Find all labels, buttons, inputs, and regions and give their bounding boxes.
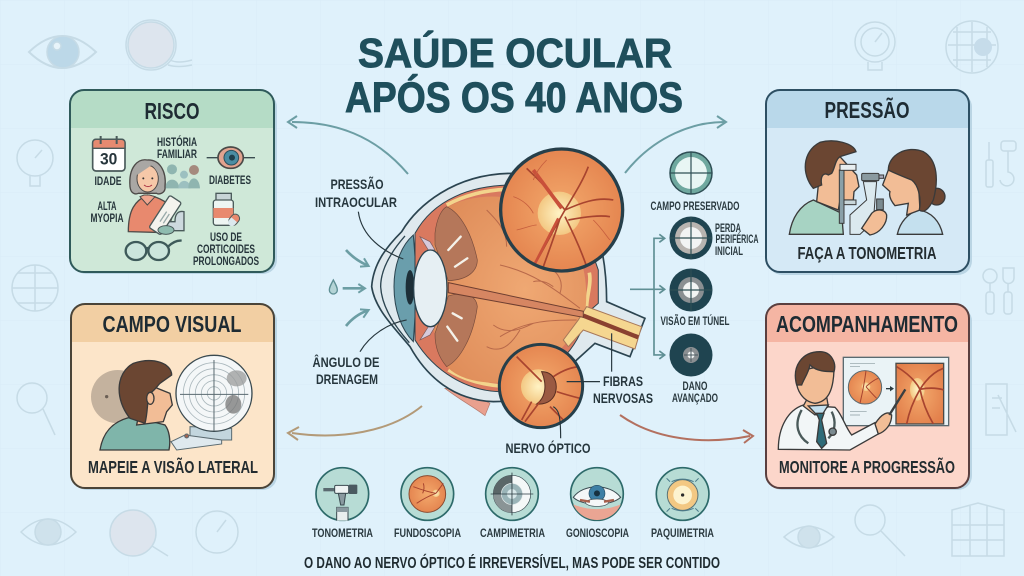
labels: risk factors: FAMILIAR xyxy=(157,147,197,161)
illustration: tonometry exam xyxy=(789,141,945,235)
diagnostic exam icons xyxy=(312,468,714,540)
tonometer xyxy=(862,173,884,210)
perimeter base xyxy=(171,427,232,450)
label: fibras nervosas xyxy=(593,373,653,406)
ciliary body xyxy=(435,207,477,367)
pointer xyxy=(889,389,905,415)
icon: eye with vessel xyxy=(207,147,255,168)
icon: calendar xyxy=(93,136,125,171)
icon: faint tools right top xyxy=(986,141,1016,187)
exam labels: PAQUIMETRIA xyxy=(651,528,714,540)
illustration: risk factors xyxy=(93,136,255,260)
title: APÓS OS 40 ANOS xyxy=(345,73,683,122)
caption: acompanhamento: MONITORE A PROGRESSÃO xyxy=(779,456,955,477)
icon: faint tools right bottom xyxy=(983,268,1014,314)
perimeter dome xyxy=(176,355,252,431)
patient xyxy=(100,361,172,450)
icon: faint grid globe left xyxy=(12,265,58,311)
heading: pressao: PRESSÃO xyxy=(824,96,910,123)
icon: family xyxy=(165,164,200,188)
footer message: O DANO AO NERVO ÓPTICO É IRREVERSÍVEL, MAS PODE SER CONTIDO xyxy=(304,553,720,572)
pupil xyxy=(406,270,414,305)
title xyxy=(345,30,683,122)
label: fibras nervosas: NERVOSAS xyxy=(593,390,653,406)
illustration: doctor and retina board xyxy=(778,352,949,450)
field labels: PERIFÉRICA xyxy=(716,233,758,246)
icon: faint grid globe top right xyxy=(946,21,998,73)
icon: faint gauge bottom left xyxy=(196,511,238,553)
central tract xyxy=(448,283,583,317)
panel: campo visual xyxy=(71,304,277,490)
label: fibras nervosas: FIBRAS xyxy=(603,373,643,389)
muscle xyxy=(445,388,490,416)
icon: faint magnifier bottom right xyxy=(855,505,905,556)
icon: calendar: 30 xyxy=(100,150,117,169)
arrow: to risco xyxy=(288,116,408,174)
labels: risk factors: ALTA xyxy=(98,199,117,213)
iris xyxy=(394,235,415,342)
label: angulo de drenagem: ÂNGULO DE xyxy=(312,353,380,370)
field labels: INICIAL xyxy=(715,246,743,258)
icon: fundoscopia xyxy=(401,468,454,520)
shadow disc xyxy=(91,370,144,423)
caption: campo visual: MAPEIE A VISÃO LATERAL xyxy=(88,456,258,477)
patient xyxy=(789,141,859,234)
choroid xyxy=(415,185,598,392)
field labels: PERDA xyxy=(715,223,741,235)
field labels: DANO xyxy=(682,381,708,393)
icon: faint eye top left xyxy=(29,36,96,68)
label: nervo optico: NERVO ÓPTICO xyxy=(506,439,591,456)
icon: faint magnifier left xyxy=(17,383,55,435)
exam labels: TONOMETRIA xyxy=(312,528,373,540)
icon: water drop xyxy=(329,280,337,294)
labels: risk factors: MYOPIA xyxy=(90,211,124,225)
icon: faint eye anatomy top left xyxy=(126,20,192,70)
heading: campo visual: CAMPO VISUAL xyxy=(102,311,242,337)
heading: risco: RISCO xyxy=(144,98,200,124)
exam labels xyxy=(312,528,714,540)
eye cross-section xyxy=(329,149,645,438)
caption: pressao: FAÇA A TONOMETRIA xyxy=(798,243,937,263)
field labels: CAMPO PRESERVADO xyxy=(650,201,740,213)
icon: faint gauge top right xyxy=(855,22,895,70)
lens: damaged optic disc xyxy=(499,344,583,428)
arrow: to acompanhamento xyxy=(620,415,753,443)
lens xyxy=(414,250,447,327)
labels: risk factors: IDADE xyxy=(94,174,122,188)
icon: faint gauge left xyxy=(17,140,53,186)
heading: acompanhamento: ACOMPANHAMENTO xyxy=(776,311,958,337)
icon: faint eye bottom left xyxy=(21,519,76,545)
icon: medication bottle xyxy=(213,193,241,228)
labels: risk factors xyxy=(90,134,259,268)
field: tunnel vision xyxy=(670,268,712,312)
bracket arrows xyxy=(630,234,665,359)
illustration: perimetry exam xyxy=(91,355,252,450)
field labels: AVANÇADO xyxy=(672,393,718,405)
icon: older woman xyxy=(128,160,174,233)
icon: faint grid bottom right xyxy=(952,503,1004,556)
exam labels: GONIOSCOPIA xyxy=(566,528,629,540)
display board xyxy=(843,357,949,426)
icon: paquimetria xyxy=(656,468,709,520)
retina yellow layer xyxy=(447,189,590,386)
arrows: inflow pressure xyxy=(343,250,369,326)
icon: campimetria xyxy=(486,468,538,520)
labels: risk factors: PROLONGADOS xyxy=(193,254,259,268)
panel: risco xyxy=(70,90,277,274)
icon: faint clipboard right xyxy=(986,384,1016,435)
sclera and nerve sheath xyxy=(372,173,645,402)
visual field progression xyxy=(630,152,758,405)
clinician xyxy=(883,150,945,234)
labels: risk factors: USO DE xyxy=(210,230,242,244)
icon: faint eye anatomy bottom left xyxy=(110,510,168,556)
field: advanced damage xyxy=(670,334,712,376)
icon: gonioscopia xyxy=(571,468,623,523)
arrow: to campo visual xyxy=(288,406,422,440)
label: pressao intraocular xyxy=(315,175,397,210)
field: preserved xyxy=(670,152,712,194)
title: SAÚDE OCULAR xyxy=(358,30,672,76)
field: early loss xyxy=(670,216,712,260)
vitreous xyxy=(433,197,586,383)
lens: healthy optic disc xyxy=(501,149,623,272)
labels: risk factors: HISTÓRIA xyxy=(157,134,197,149)
exam labels: FUNDOSCOPIA xyxy=(394,528,461,540)
cornea xyxy=(381,236,409,343)
field labels: VISÃO EM TÚNEL xyxy=(660,315,730,328)
labels: risk factors: CORTICOIDES xyxy=(197,242,255,256)
panel: acompanhamento xyxy=(766,304,972,490)
icon: faint eye bottom right xyxy=(784,526,834,548)
retinal vessels xyxy=(487,210,580,349)
leader lines xyxy=(358,212,612,438)
optic nerve xyxy=(563,307,642,349)
label: angulo de drenagem xyxy=(312,353,380,387)
panel: pressao xyxy=(766,90,972,275)
slit lamp xyxy=(839,164,877,234)
hand xyxy=(862,210,887,235)
label: pressao intraocular: INTRAOCULAR xyxy=(315,194,397,210)
field labels xyxy=(650,201,758,405)
icon: eye drops tube xyxy=(149,195,184,235)
arrow: to pressao xyxy=(625,116,726,173)
icon: tonometria xyxy=(316,468,369,521)
labels: risk factors: DIABETES xyxy=(209,173,251,187)
exam labels: CAMPIMETRIA xyxy=(480,528,545,540)
icon: glasses xyxy=(126,241,182,260)
ciliary supports xyxy=(420,237,435,340)
label: angulo de drenagem: DRENAGEM xyxy=(316,371,378,387)
doctor xyxy=(778,352,892,450)
ciliary highlights xyxy=(447,237,467,341)
label: pressao intraocular: PRESSÃO xyxy=(330,175,384,192)
